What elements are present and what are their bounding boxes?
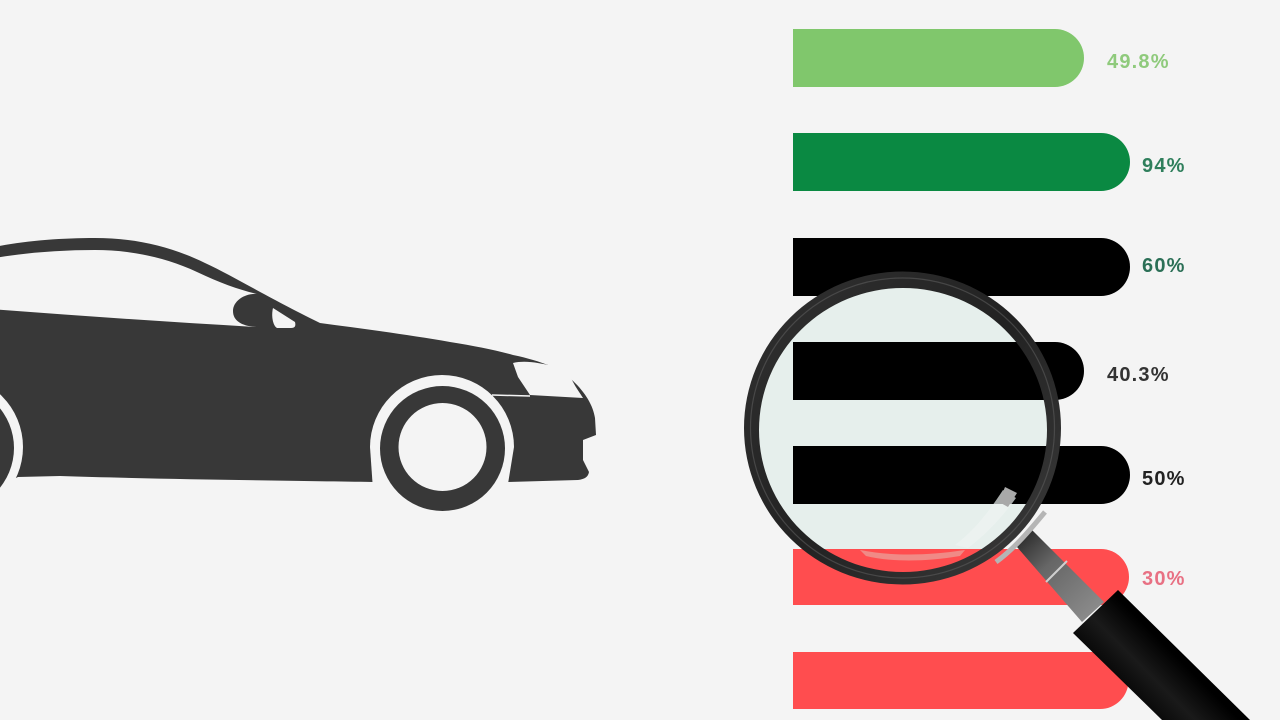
magnifier ring [744,271,1061,584]
label: bar 6 value: 30% [1142,568,1186,590]
lens glint tip [999,487,1017,507]
rear tyre [0,385,14,511]
icon: car silhouette [0,238,596,519]
magnifier lens [757,286,1049,574]
ring highlight [750,278,1054,578]
car body [0,238,596,490]
label: bar 5 value: 50% [1142,468,1186,490]
lens glint streak [955,490,1016,548]
handle neck [1017,530,1104,622]
label: bar 3 value: 60% [1142,255,1186,277]
front hub [398,403,486,491]
icon: magnifying glass [744,271,1250,720]
handle neck highlight [1046,561,1067,582]
bar 1: light green [793,29,1084,87]
handle grip [1073,590,1250,720]
ring collar [996,512,1045,562]
bar 6: red [793,549,1129,605]
bar 5: black [793,446,1130,504]
front wheel arch [370,375,514,490]
label: bar 2 value: 94% [1142,155,1186,177]
label: bar 4 value: 40.3% [1107,364,1170,386]
car headlight [513,362,583,398]
bar 2: dark green [793,133,1130,191]
bar 4: black [793,342,1084,400]
front tyre [380,386,505,511]
rear wheel arch [0,375,23,519]
bar 7: red [793,652,1128,709]
car side window [0,250,257,327]
car quarter-light window [272,308,295,328]
label: bar 1 value: 49.8% [1107,51,1170,73]
lens glint on red bar [860,550,965,560]
bar 3: black [793,238,1130,296]
car headlight lower line [492,395,530,396]
